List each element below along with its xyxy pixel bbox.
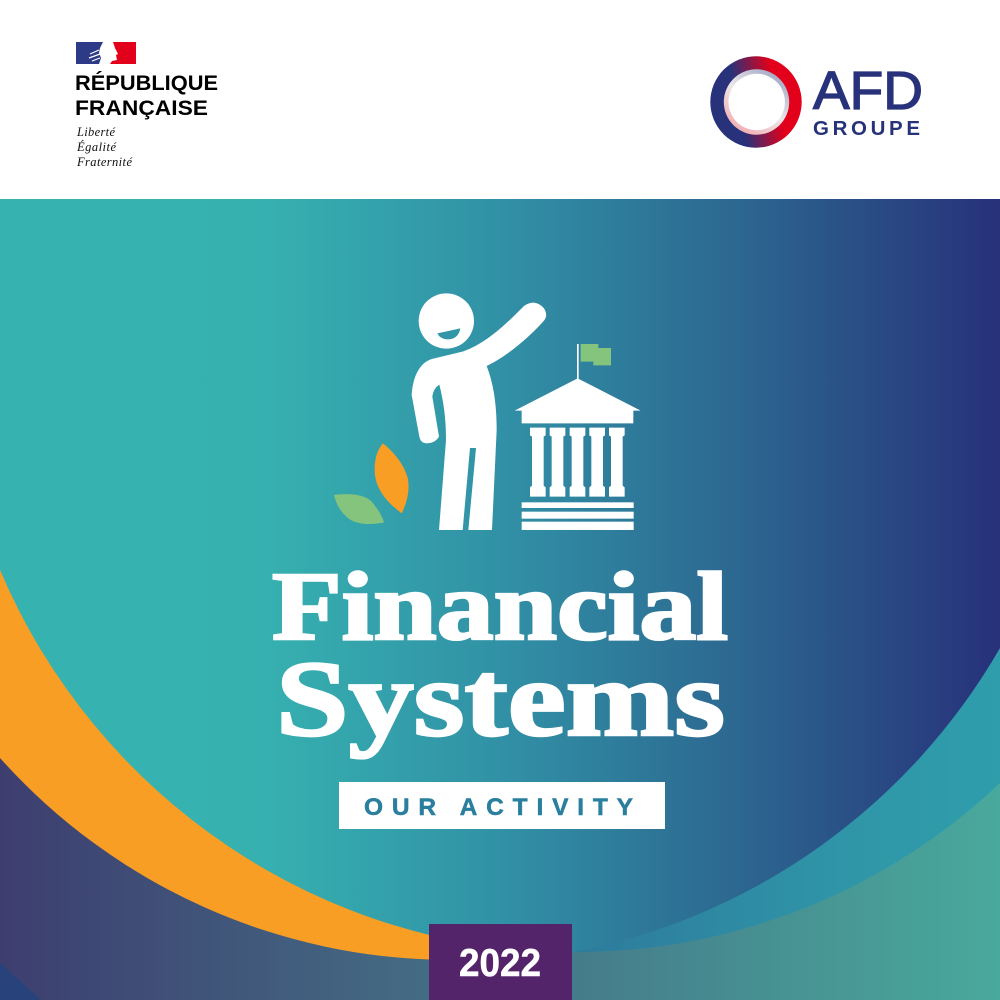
logo: AFD Groupe: [710, 56, 923, 148]
wave: lower band: [0, 758, 1000, 1000]
Groupe wordmark: GROUPE: [813, 117, 920, 140]
green leaf: [334, 494, 384, 524]
white header band: [0, 0, 1000, 199]
year badge: [429, 924, 572, 1000]
motto: Liberté: [76, 125, 115, 139]
wordmark: FRANÇAISE: [75, 97, 208, 120]
motto: Fraternité: [76, 155, 132, 169]
ring mark: [710, 56, 802, 148]
wordmark: [75, 72, 218, 120]
title: Financial: [272, 553, 728, 661]
person: [412, 293, 546, 530]
subtitle label: [339, 782, 665, 829]
title: Systems: [276, 640, 725, 759]
flag block: [76, 42, 136, 64]
subtitle label: OUR ACTIVITY: [364, 794, 633, 821]
wave: orange band: [0, 570, 570, 1000]
AFD wordmark: AFD: [813, 61, 923, 121]
title: [272, 553, 728, 759]
logo: République Française: [75, 42, 218, 169]
motto: Égalité: [76, 140, 116, 154]
illustration: person, bank and leaves: [334, 293, 641, 530]
corner triangle: [0, 963, 41, 1000]
year badge: 2022: [459, 942, 541, 985]
bank building: [515, 378, 641, 530]
wordmark: RÉPUBLIQUE: [75, 72, 218, 95]
wave: right teal: [574, 648, 1000, 1000]
motto: [76, 125, 132, 169]
flag: [577, 344, 611, 379]
orange leaf: [375, 443, 409, 513]
